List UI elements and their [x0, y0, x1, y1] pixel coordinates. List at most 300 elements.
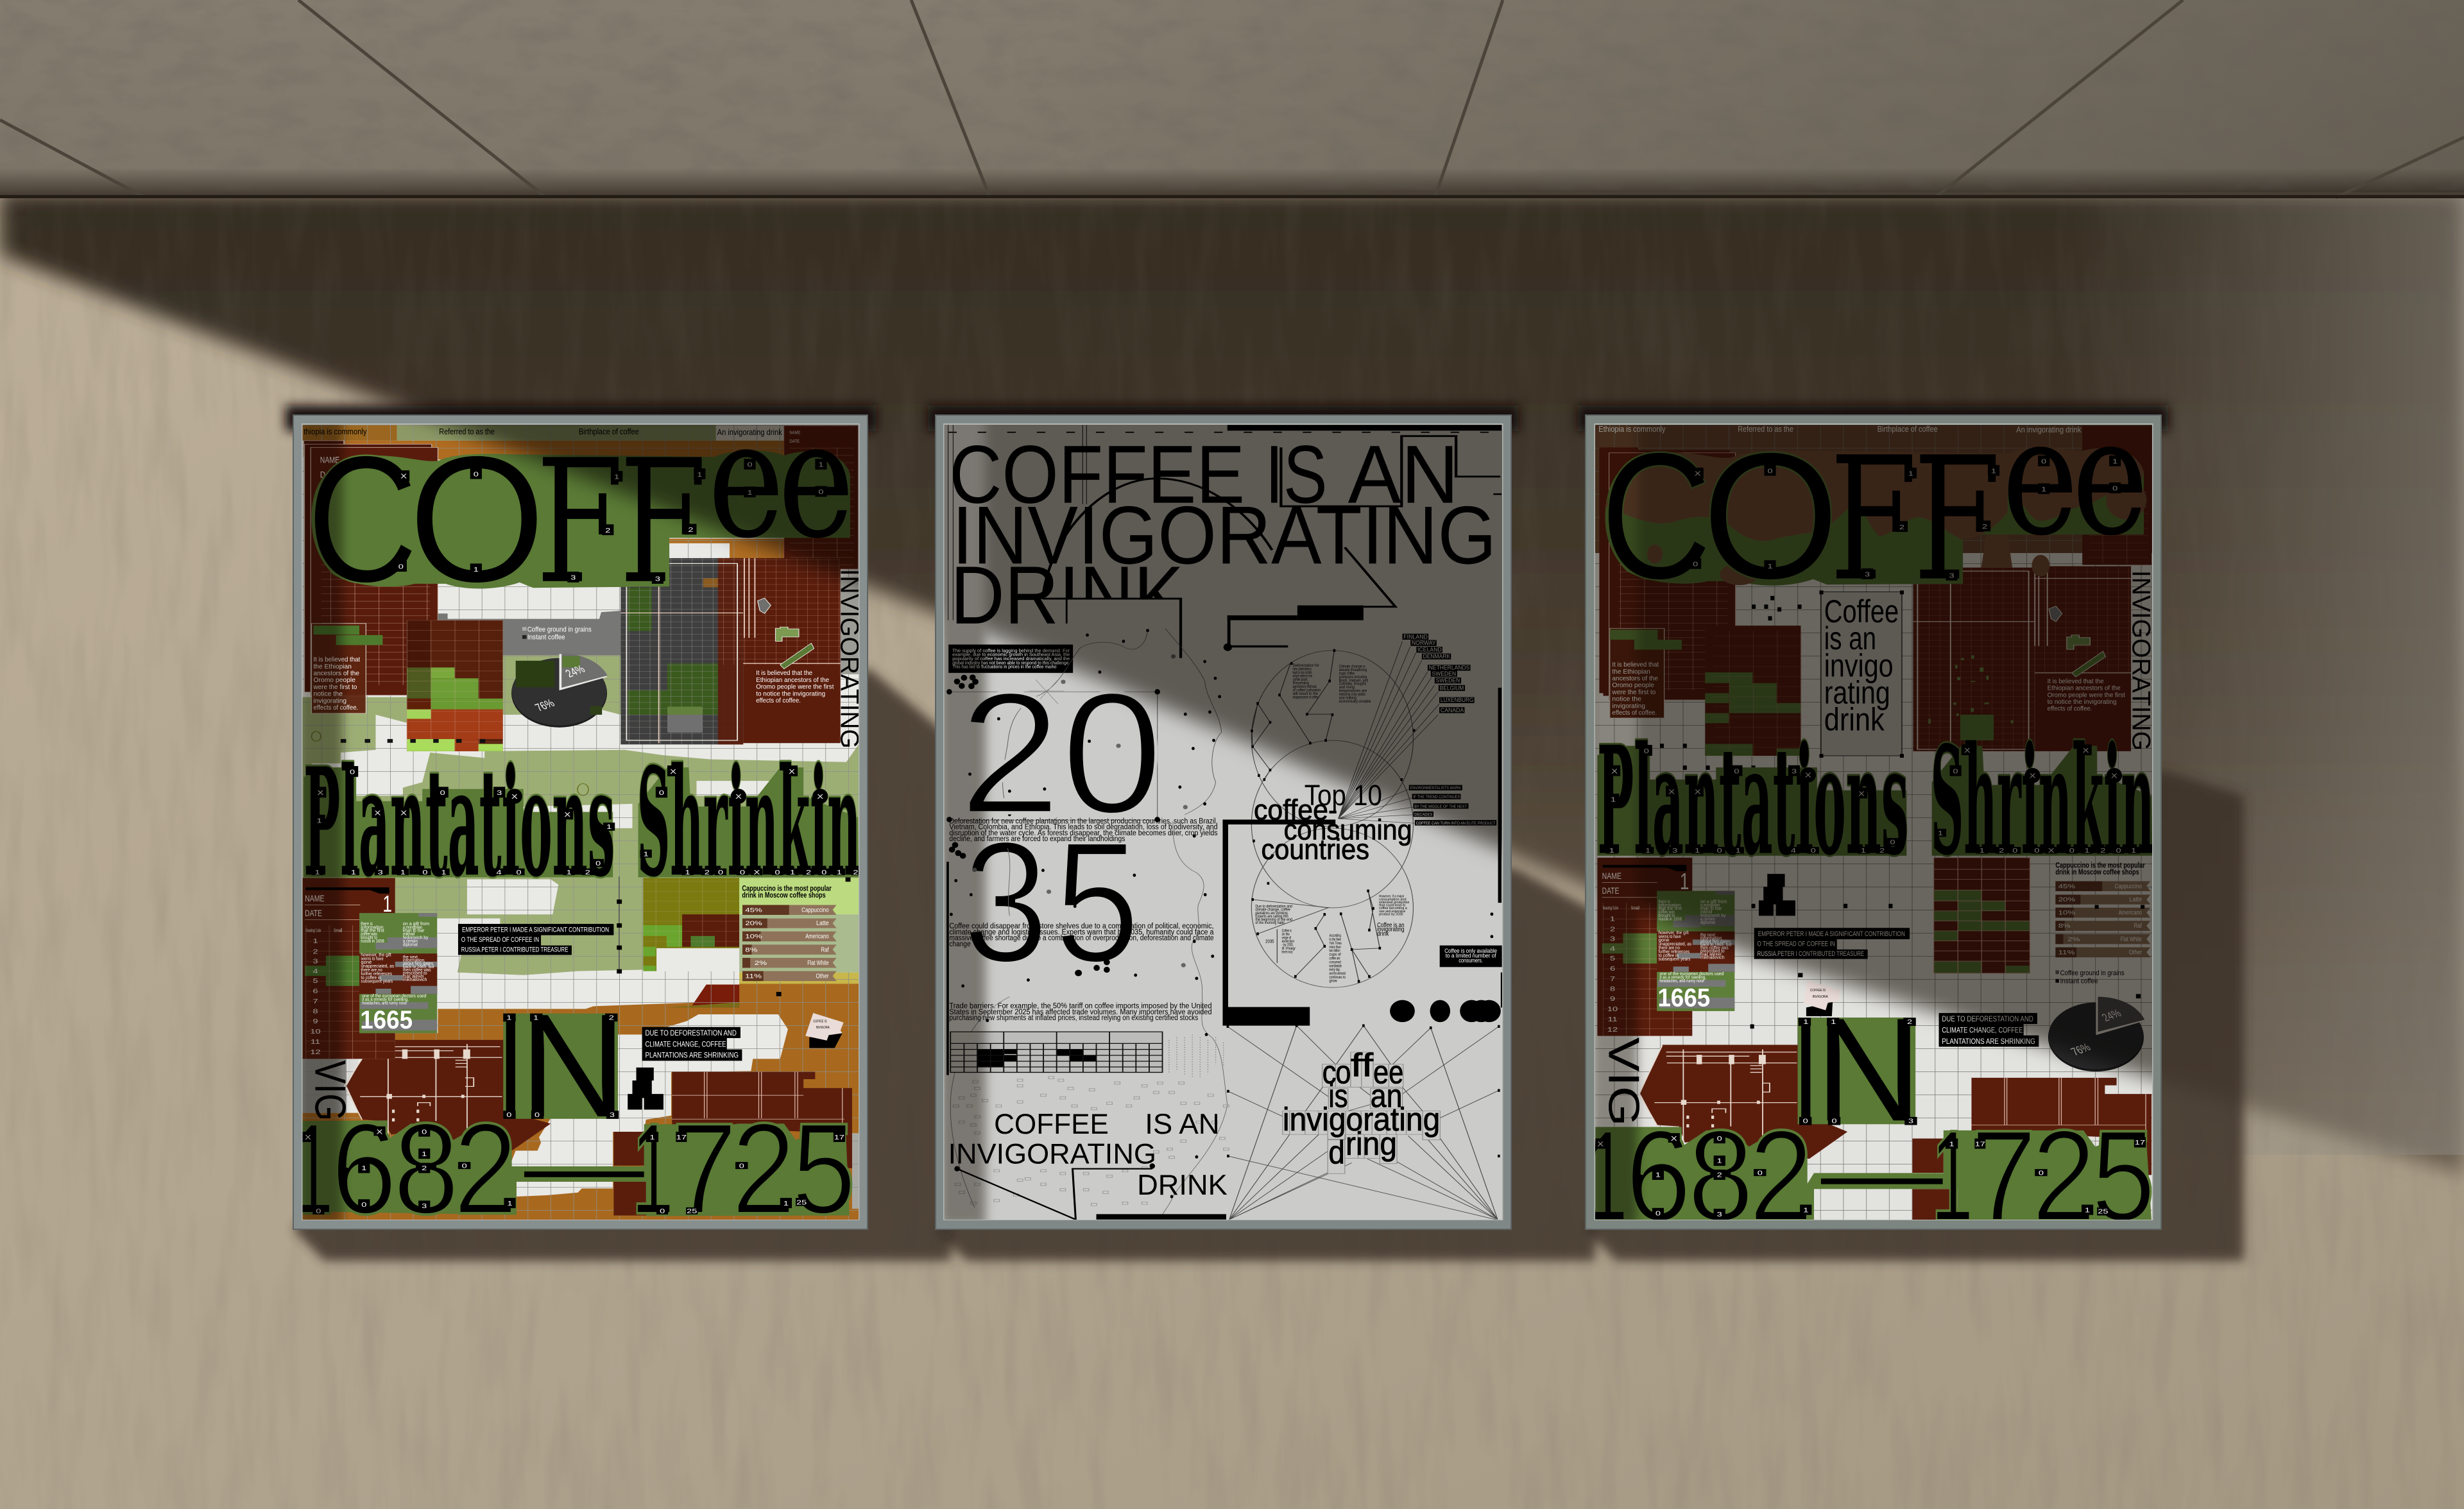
title COFFee with camouflage backing: 0 — [1767, 467, 1773, 475]
bar chart panel: 2% — [755, 960, 767, 966]
coffee text panel: Coffee — [1824, 593, 1899, 629]
title COFFee with camouflage backing: 2 — [1982, 523, 1987, 530]
network labels lower: become a luxury — [1282, 950, 1293, 954]
title COFFee: 1 — [818, 461, 824, 468]
deforestation text block: PLANTATIONS ARE SHRINKING — [645, 1051, 739, 1060]
emperor text block: O THE SPREAD OF COFFEE IN — [1758, 939, 1835, 948]
years 1682 = 1725: 1 — [361, 1164, 366, 1172]
NAME DATE table: 10 — [1607, 1005, 1618, 1012]
title Plantations Shrinkin: X — [1858, 790, 1865, 797]
text: Shrinkin — [637, 735, 860, 910]
coffee is an invigorating dring lettering — [1283, 1047, 1440, 1173]
pie chart: 76% — [533, 697, 557, 714]
network labels lower: coffee are — [1330, 956, 1340, 960]
title COFFee — [307, 385, 855, 622]
NAME DATE table: 12 — [1607, 1026, 1618, 1033]
title COFFee: 2 — [688, 526, 693, 534]
paper note icon — [1804, 980, 1840, 1016]
NAME DATE table: 4 — [1610, 945, 1615, 952]
coffee text panel: drink — [1824, 701, 1885, 738]
deforestation note: already threatening — [1339, 667, 1367, 672]
note card: notice the — [313, 690, 343, 697]
network labels lower: two billion — [1330, 948, 1340, 953]
title number tags: 0 — [516, 869, 522, 876]
title Plantations Shrinkin: 3 — [1792, 767, 1797, 775]
years 1682 = 1725: 0 — [2039, 1170, 2044, 1177]
title Plantations Shrinkin: X — [375, 810, 381, 817]
bar chart panel: Americano — [805, 933, 829, 940]
title Plantations Shrinkin: X — [1611, 767, 1618, 775]
years 1682 = 1725: 5 — [2091, 1104, 2155, 1249]
left data table — [304, 441, 438, 695]
title COFFee: 0 — [747, 461, 753, 468]
coffee is an invigorating dring lettering: e — [1389, 1053, 1403, 1091]
coffee text panel: rating — [1824, 674, 1890, 711]
deforestation text block: PLANTATIONS ARE SHRINKING — [1942, 1037, 2035, 1046]
IN block — [497, 984, 626, 1148]
info card 1665: a mongolian — [1700, 903, 1720, 908]
handles and dots — [1660, 596, 1802, 770]
title number tags: 0 — [595, 860, 601, 867]
deforestation note: and rising — [1339, 685, 1355, 690]
note card: invigorating — [313, 697, 346, 704]
chart panel: 11% — [2058, 950, 2075, 956]
paragraph deforestation: disruption of the water cycle. As forests disappear, the climate becomes drier, crop yields — [949, 828, 1218, 837]
title Plantations Shrinkin: X — [817, 793, 824, 800]
title number tags: 0 — [2116, 847, 2121, 855]
title COFFee: 3 — [570, 574, 576, 581]
card with table NAME DATE: Roasting/ Color — [305, 928, 321, 933]
title number tags: 1 — [1645, 847, 1650, 855]
deforestation note: reducing crop yields — [1339, 692, 1365, 697]
info card 1665: then coffee was — [1700, 945, 1729, 950]
card with table NAME DATE: DATE — [305, 908, 322, 918]
note card: effects of coffee. — [1612, 708, 1657, 716]
scattered handles — [1750, 904, 1892, 1028]
coffee is an invigorating dring lettering: an — [1371, 1077, 1403, 1114]
note card: the Ethiopian — [313, 662, 352, 670]
years 1682 = 1725: X — [305, 1134, 312, 1141]
scattered nodes — [1003, 628, 1222, 815]
title number tags: 1 — [315, 869, 320, 876]
info card 1665: headaches, and runny nose — [1659, 978, 1704, 983]
years 1682 = 1725: 0 — [361, 1201, 366, 1208]
chart panel: Raf — [2134, 922, 2142, 930]
IN block: 0 — [506, 1111, 511, 1118]
country labels with fan: IF THE TREND CONTINUES — [1413, 794, 1460, 799]
network labels lower: and the demand — [1330, 971, 1346, 976]
coffee text panel — [1819, 590, 1904, 758]
text strip: Referred to as the — [1738, 425, 1793, 434]
info card 1665: however, the gift — [361, 952, 391, 957]
title Plantations Shrinkin: X — [2030, 772, 2036, 780]
data table — [950, 1032, 1163, 1072]
years 1682 = 1725: X — [1597, 1140, 1604, 1148]
red grid panel with scattered beans: Oromo people were the first — [2048, 691, 2125, 699]
title Plantations Shrinkin: X — [789, 768, 796, 775]
years 1682 = 1725: 17 — [1975, 1140, 1985, 1148]
limited consumers box: Coffee is only available — [1444, 948, 1497, 954]
poster 3: dark coffee poster — [1586, 382, 2155, 1249]
info card 1665: it as a remedy for swelling, — [1659, 975, 1706, 980]
headline: DRINK — [950, 549, 1184, 641]
headline: INVIGORATING — [952, 489, 1496, 581]
title number tags: 3 — [1672, 847, 1677, 855]
text strip: Ethiopia is commonly — [1598, 425, 1666, 434]
heat table — [1705, 626, 1810, 761]
title number tags: 1 — [837, 869, 842, 876]
left data table — [1599, 447, 1736, 700]
NAME DATE table: 2 — [1610, 926, 1615, 933]
info card 1665: mikhailovich — [1700, 955, 1725, 960]
dotted line row — [341, 739, 485, 743]
paper note icon: COFFEE IS — [813, 1019, 827, 1023]
text strip: An invigorating drink — [717, 428, 782, 437]
info card 1665: mikhailovich — [403, 977, 427, 982]
title number tags: 0 — [422, 869, 428, 876]
years 1682 = 1725: 1 — [1931, 1104, 1973, 1249]
info card 1665: subsequent years — [1659, 957, 1691, 962]
title number tags: 0 — [2012, 847, 2017, 855]
paragraph shortage: Coffee could disappear from store shelves due to a combination of political, economic, — [949, 922, 1214, 930]
title number tags: 1 — [441, 869, 447, 876]
info card 1665: on a gift from — [1700, 899, 1727, 904]
country labels with fan: ENVIRONMENTALISTS WARN — [1410, 785, 1460, 790]
info card 1665: unappreciated, as — [1659, 941, 1691, 946]
text strip: An invigorating drink — [2016, 425, 2082, 434]
note card — [1610, 628, 1682, 718]
title number tags: 1 — [1938, 830, 1943, 837]
title Plantations Shrinkin: X — [1964, 747, 1971, 754]
note card: Oromo people — [313, 676, 355, 684]
vertical VIG: VIG — [305, 1060, 354, 1121]
coffee text panel: invigo — [1824, 647, 1894, 684]
text strip — [1598, 425, 2082, 434]
network labels lower: According — [1330, 933, 1341, 938]
bar chart panel: 20% — [745, 921, 762, 926]
country labels with fan: SWEDEN — [1436, 678, 1460, 684]
years 1682 = 1725: 0 — [1656, 1210, 1661, 1217]
title COFFee with camouflage backing: 1 — [1991, 467, 1996, 475]
country labels with fan: DENMARK — [1423, 654, 1450, 660]
coffee is an invigorating dring lettering: is — [1328, 1077, 1348, 1114]
deforestation note: Brazil, Vietnam, and — [1339, 678, 1368, 683]
red grid panel with scattered beans: to notice the invigorating — [2048, 698, 2117, 706]
chart panel: Other — [2129, 949, 2142, 956]
red grid panel: Oromo people were the first — [756, 683, 834, 690]
cast shadows of the posters — [286, 405, 2244, 1261]
NAME DATE table: Roasting/ Color — [1603, 905, 1618, 910]
deforestation note — [1292, 663, 1371, 704]
info card 1665: subsequent years — [361, 978, 393, 984]
paper note icon: INVIGORA — [816, 1025, 830, 1030]
card with table NAME DATE: 5 — [312, 977, 318, 985]
title number tags: 2 — [1879, 847, 1885, 855]
info card 1665: on a gift from — [403, 921, 429, 926]
left data table: NAME — [320, 456, 339, 465]
info card 1665: 1665 — [1657, 983, 1710, 1012]
card with table NAME DATE: NAME — [305, 894, 324, 903]
bar chart panel: 45% — [745, 907, 762, 914]
chart panel: 45% — [2058, 883, 2075, 890]
info card 1665: khan to tsar — [403, 928, 424, 933]
info card 1665: about him dates — [403, 960, 434, 966]
paragraph deforestation: Deforestation for new coffee plantations in the largest producing countries, such as Brazil, — [949, 817, 1218, 826]
title COFFee: 1 — [474, 566, 479, 573]
title number tags: 1 — [2131, 847, 2136, 855]
Top 10 heading part — [1254, 779, 1382, 826]
paper note icon — [805, 1013, 844, 1048]
title COFFee: 0 — [818, 488, 824, 496]
poster 3 lower half — [1586, 829, 2155, 1249]
supply text box: global industry has not been able to respond to this challenge. — [952, 660, 1070, 665]
deforestation note: will result in the — [1292, 691, 1318, 696]
years 1682 = 1725: 0 — [1717, 1135, 1722, 1142]
lower ground patches — [303, 875, 860, 1221]
vertical INVIGORATING: INVIGORATING — [2126, 570, 2155, 751]
coffee text panel: is an — [1824, 620, 1876, 656]
info card 1665: there is — [1659, 899, 1670, 904]
card with table NAME DATE: Small — [334, 928, 342, 933]
info card 1665: to coffee in — [361, 975, 381, 980]
note card: Oromo people — [1612, 681, 1654, 689]
info card 1665: information — [403, 957, 424, 962]
poster 2 lower half — [946, 805, 1502, 1220]
years 1682 = 1725: 1 — [291, 1096, 334, 1241]
deforestation note: which affects the — [1292, 674, 1312, 678]
deforestation note: producers including — [1339, 674, 1367, 679]
network labels lower: verge of — [1282, 935, 1292, 940]
IN block: 3 — [1908, 1118, 1913, 1125]
NAME DATE table: 6 — [1610, 965, 1615, 973]
title Plantations Shrinkin: X — [318, 789, 324, 796]
info card 1665: tsar alexei — [1700, 951, 1722, 957]
title Plantations Shrinkin: X — [670, 768, 677, 775]
COFFEE IS AN INVIGORATING DRINK caption: DRINK — [1137, 1169, 1228, 1201]
headline: IS — [1265, 428, 1328, 520]
info card 1665: there is — [361, 921, 373, 926]
title COFFee with camouflage backing: e — [2002, 382, 2078, 571]
years 1682 = 1725: 1 — [1717, 1157, 1722, 1164]
blueprint hexagon — [1639, 1045, 1847, 1159]
info card 1665: mikhail — [403, 932, 415, 937]
network labels lower: it may — [1282, 946, 1296, 951]
card with table NAME DATE: 3 — [312, 958, 318, 965]
heat table — [1934, 858, 2030, 973]
pie chart: 76% — [2069, 1041, 2093, 1058]
bar chart panel: Other — [816, 973, 829, 980]
upper ground patches — [303, 425, 859, 885]
years 1682 = 1725: 0 — [422, 1129, 427, 1136]
IN block: 2 — [609, 1014, 614, 1021]
info card 1665: unappreciated, as — [361, 964, 394, 969]
IN block: 0 — [1831, 1118, 1837, 1125]
coffee is an invigorating dring lettering: c — [1322, 1053, 1336, 1091]
coffee is an invigorating dring lettering: f — [1362, 1047, 1373, 1084]
blueprint hexagon — [345, 1040, 551, 1150]
chart panel: Coffee ground in grains — [2060, 969, 2125, 976]
years 1682 = 1725: 6 — [331, 1096, 397, 1241]
info card 1665: russia in 1658 — [361, 939, 384, 944]
title number tags: 0 — [1811, 847, 1816, 855]
network labels lower: rare and expensive — [1379, 908, 1405, 913]
pie chart — [511, 653, 608, 728]
years 1682 = 1725: 1 — [2085, 1207, 2090, 1214]
paragraph shortage: change — [949, 939, 971, 948]
years 1682 = 1725: 17 — [834, 1134, 844, 1141]
bar chart panel: Raf — [821, 946, 829, 953]
note card: the Ethiopian — [1612, 667, 1650, 675]
paragraph shortage: massive coffee shortage due to a combination of overproduction, deforestation and climate — [949, 934, 1214, 942]
country labels with fan: BY THE MIDDLE OF THE NEXT — [1414, 803, 1467, 808]
coffee is an invigorating dring lettering: e — [1373, 1053, 1389, 1091]
title number tags — [1606, 829, 2139, 855]
info card 1665: a certain — [403, 939, 418, 944]
IN block: 1 — [1803, 1018, 1808, 1026]
title number tags: 0 — [2069, 847, 2075, 855]
title Plantations Shrinkin: 0 — [1644, 747, 1649, 754]
title COFFee: F — [536, 423, 624, 622]
paragraph deforestation: Vietnam, Colombia, and Ethiopia. This leads to soil degradation, loss of biodiversity, and — [949, 823, 1218, 831]
NAME DATE table: DATE — [1602, 886, 1619, 896]
network labels lower: cups of — [1330, 952, 1341, 957]
title number tags: 2 — [853, 869, 858, 876]
years 1682 = 1725: X — [377, 1129, 383, 1136]
text strip: thiopia is commonly — [304, 428, 367, 436]
olive heat table — [643, 878, 740, 971]
title Plantations Shrinkin: X — [735, 793, 742, 800]
charts and tables upper half — [303, 426, 859, 879]
bar chart panel: Flat White — [807, 959, 829, 966]
title number tags: 2 — [585, 869, 590, 876]
network labels lower: extinction — [1282, 939, 1294, 944]
bar chart panel — [739, 878, 859, 981]
info card 1665: a certain — [1700, 916, 1715, 921]
network labels lower: - by 2035, — [1282, 942, 1294, 947]
deforestation note: Deforestation for — [1293, 663, 1319, 668]
note card: ancestors of the — [1612, 674, 1658, 682]
supply text box: popularity of coffee has increased dramatically, and the — [952, 656, 1070, 661]
title COFFee with camouflage backing: 3 — [1949, 572, 1955, 579]
info card 1665 — [359, 913, 437, 1034]
limited consumers box: consumers. — [1459, 958, 1483, 964]
title Plantations Shrinkin — [304, 735, 860, 910]
network labels lower — [1251, 840, 1409, 983]
info card 1665: fedorovich by — [403, 935, 429, 940]
years 1682 = 1725: 1 — [631, 1096, 674, 1241]
info card 1665: the next — [1700, 932, 1715, 937]
title number tags: 1 — [351, 869, 356, 876]
title Plantations Shrinkin: X — [2083, 747, 2089, 754]
note card: It is believed that — [313, 655, 360, 663]
Top 10 heading remainder — [1261, 814, 1412, 865]
coffee is an invigorating dring lettering: invigorating — [1283, 1101, 1440, 1138]
deforestation note: and making — [1339, 695, 1356, 700]
title COFFee: 0 — [398, 563, 404, 570]
info card 1665: there are no — [361, 968, 382, 973]
card with table NAME DATE: 10 — [310, 1028, 321, 1035]
deforestation note: of coffee cultivation — [1293, 688, 1321, 692]
deforestation note: Preventing — [1293, 681, 1309, 685]
network labels lower: on the — [1282, 932, 1290, 937]
title number tags: 3 — [378, 869, 383, 876]
years 1682 = 1725: 1 — [1586, 1104, 1628, 1249]
pie chart: 24% — [2100, 1007, 2124, 1024]
network labels lower: Experts are calling this — [1255, 914, 1288, 918]
emperor text block: RUSSIA.PETER I CONTRIBUTED TREASURE — [1758, 950, 1864, 957]
COFFEE IS AN INVIGORATING DRINK caption: IS AN — [1145, 1108, 1220, 1140]
title COFFee with camouflage backing: C — [1600, 415, 1712, 617]
chart panel — [2055, 862, 2150, 998]
title number tags: 1 — [2084, 847, 2090, 855]
card with table NAME DATE: 11 — [311, 1038, 320, 1045]
chart panel: Cappuccino — [2115, 883, 2142, 890]
IN block — [1792, 988, 1922, 1152]
title Plantations Shrinkin: X — [511, 793, 518, 800]
poster 2: gray typographic poster — [944, 425, 1503, 1220]
red grid panel: to notice the invigorating — [756, 690, 825, 697]
network labels lower: every day, — [1330, 968, 1340, 972]
title COFFee with camouflage backing: O — [1702, 415, 1840, 617]
title COFFee: 2 — [605, 527, 610, 534]
years 1682 = 1725 — [1586, 1104, 2155, 1249]
title Plantations Shrinkin: 0 — [1953, 767, 1958, 775]
NAME DATE table: Small — [1631, 905, 1639, 910]
title COFFee with camouflage backing: 0 — [1693, 561, 1698, 568]
pictogram — [1759, 874, 1795, 916]
deforestation text block: CLIMATE CHANGE, COFFEE — [645, 1040, 726, 1049]
info card 1665: mikhail — [1700, 909, 1712, 914]
red grid panel: effects of coffee. — [756, 696, 801, 704]
deforestation text block: DUE TO DEFORESTATION AND — [645, 1028, 737, 1037]
right data table — [784, 426, 858, 569]
IN block: 1 — [1831, 1018, 1836, 1026]
Top 10 heading part: coffee- — [1254, 794, 1337, 826]
info card 1665 — [1657, 891, 1734, 1012]
title Plantations Shrinkin: 0 — [659, 789, 664, 796]
years 1682 = 1725: 6 — [1625, 1104, 1691, 1249]
years 1682 = 1725: 8 — [393, 1096, 459, 1241]
info card 1665: information — [1700, 935, 1722, 941]
info card 1665: information — [1659, 903, 1681, 908]
chart panel: 20% — [2058, 897, 2075, 903]
title number tags: 0 — [821, 869, 826, 876]
sunlight shadow over posters — [0, 192, 2464, 1225]
title number tags — [311, 823, 859, 876]
title COFFee with camouflage backing: F — [1913, 420, 2001, 618]
network labels lower: drink — [1377, 930, 1389, 937]
info card 1665: one of the european doctors used — [1659, 971, 1724, 976]
network labels lower: of the morning habit — [1255, 920, 1285, 925]
note card: were the first to — [313, 683, 357, 690]
red grid panel with scattered beans: It is believed that the — [2048, 677, 2104, 685]
info card 1665: headaches, and runny nose — [362, 1000, 407, 1005]
info card 1665: diplomat — [403, 942, 418, 947]
limited consumers box: to a limited number of — [1446, 953, 1496, 959]
bar chart panel: 8% — [745, 947, 758, 953]
years 1682 = 1725 — [291, 1096, 856, 1241]
deforestation note: temperatures are — [1339, 688, 1367, 693]
card with table NAME DATE: 1 — [312, 937, 318, 945]
title number tags: 1 — [1736, 847, 1741, 855]
network labels lower: However, if a major — [1379, 894, 1405, 898]
bar chart panel: 10% — [745, 934, 762, 940]
right data table: DATE — [789, 438, 800, 443]
IN block: I — [497, 984, 524, 1148]
emperor text block: O THE SPREAD OF COFFEE IN — [461, 935, 539, 944]
IN block: 1 — [533, 1014, 538, 1021]
title number tags: X — [754, 869, 760, 876]
